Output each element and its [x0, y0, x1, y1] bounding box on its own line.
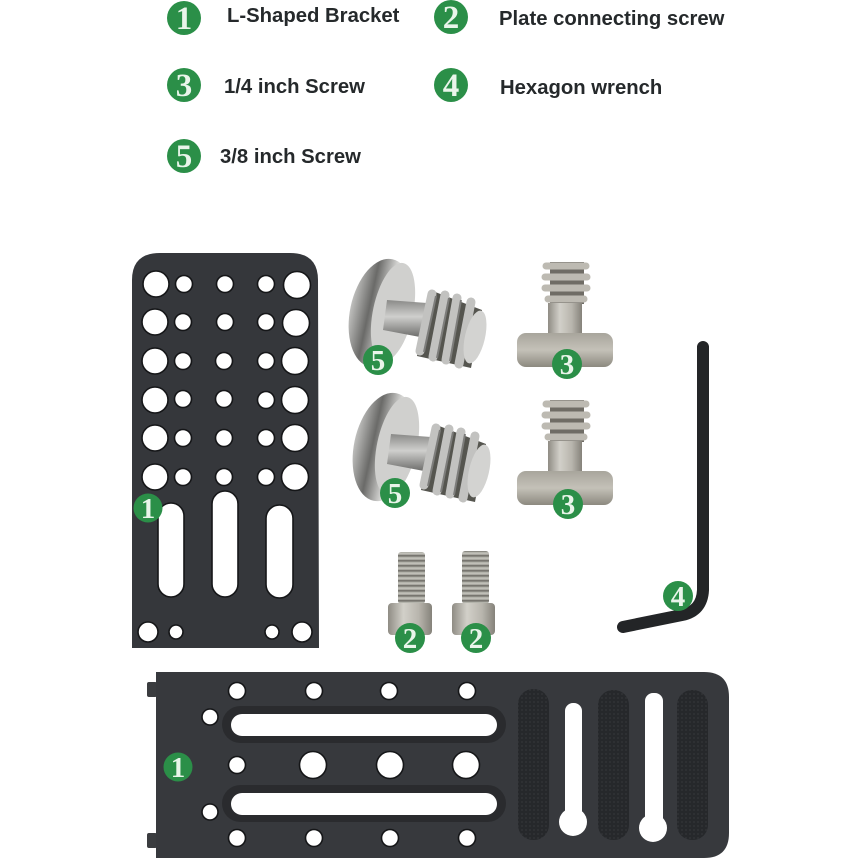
badge 5 upper: 5: [371, 345, 385, 377]
legend item 4: Hexagon wrench: [434, 68, 662, 104]
badge 1 on vertical plate: 1: [141, 493, 155, 525]
3/8 inch screw, upper: [339, 253, 491, 377]
legend item 3: 1/4 inch Screw: 1/4 inch Screw: [224, 76, 365, 98]
badge 1 on horizontal plate: 1: [171, 752, 185, 784]
legend item 1: L-Shaped Bracket: L-Shaped Bracket: [227, 5, 400, 27]
legend item 1: L-Shaped Bracket: 1: [176, 1, 192, 37]
badge 5 upper: [363, 345, 393, 377]
badge 1 on vertical plate: [134, 493, 162, 525]
badge 4: 4: [671, 581, 685, 613]
legend: [167, 0, 725, 175]
badge 1 on horizontal plate: [164, 752, 192, 784]
legend item 5: 3/8 inch Screw: 5: [176, 139, 192, 175]
1/4 inch screw, upper: [517, 262, 613, 381]
legend item 2: Plate connecting screw: Plate connecting screw: [499, 8, 725, 30]
hexagon wrench: [623, 347, 703, 627]
vertical bracket plate: [132, 253, 319, 648]
badge 2 right: 2: [469, 623, 483, 655]
badge 4: [663, 581, 693, 613]
badge 5 lower: 5: [388, 478, 402, 510]
3/8 inch screw, lower: [343, 387, 495, 510]
badge 2 left: 2: [403, 623, 417, 655]
plate connecting screw, left: [388, 552, 432, 655]
horizontal bracket plate: [147, 672, 729, 858]
legend item 1: L-Shaped Bracket: [167, 1, 400, 37]
1/4 inch screw, lower: [517, 400, 613, 521]
legend item 5: 3/8 inch Screw: 3/8 inch Screw: [220, 146, 361, 168]
legend item 5: 3/8 inch Screw: [167, 139, 361, 175]
legend item 4: Hexagon wrench: Hexagon wrench: [500, 77, 662, 99]
badge 5 lower: [380, 478, 410, 510]
legend item 2: Plate connecting screw: 2: [443, 0, 459, 36]
legend item 4: Hexagon wrench: 4: [443, 68, 459, 104]
badge 3 lower: 3: [561, 489, 575, 521]
legend item 3: 1/4 inch Screw: [167, 68, 365, 104]
badge 3 upper: 3: [560, 349, 574, 381]
legend item 3: 1/4 inch Screw: 3: [176, 68, 192, 104]
legend item 2: Plate connecting screw: [434, 0, 725, 36]
plate connecting screw, right: [452, 551, 495, 655]
